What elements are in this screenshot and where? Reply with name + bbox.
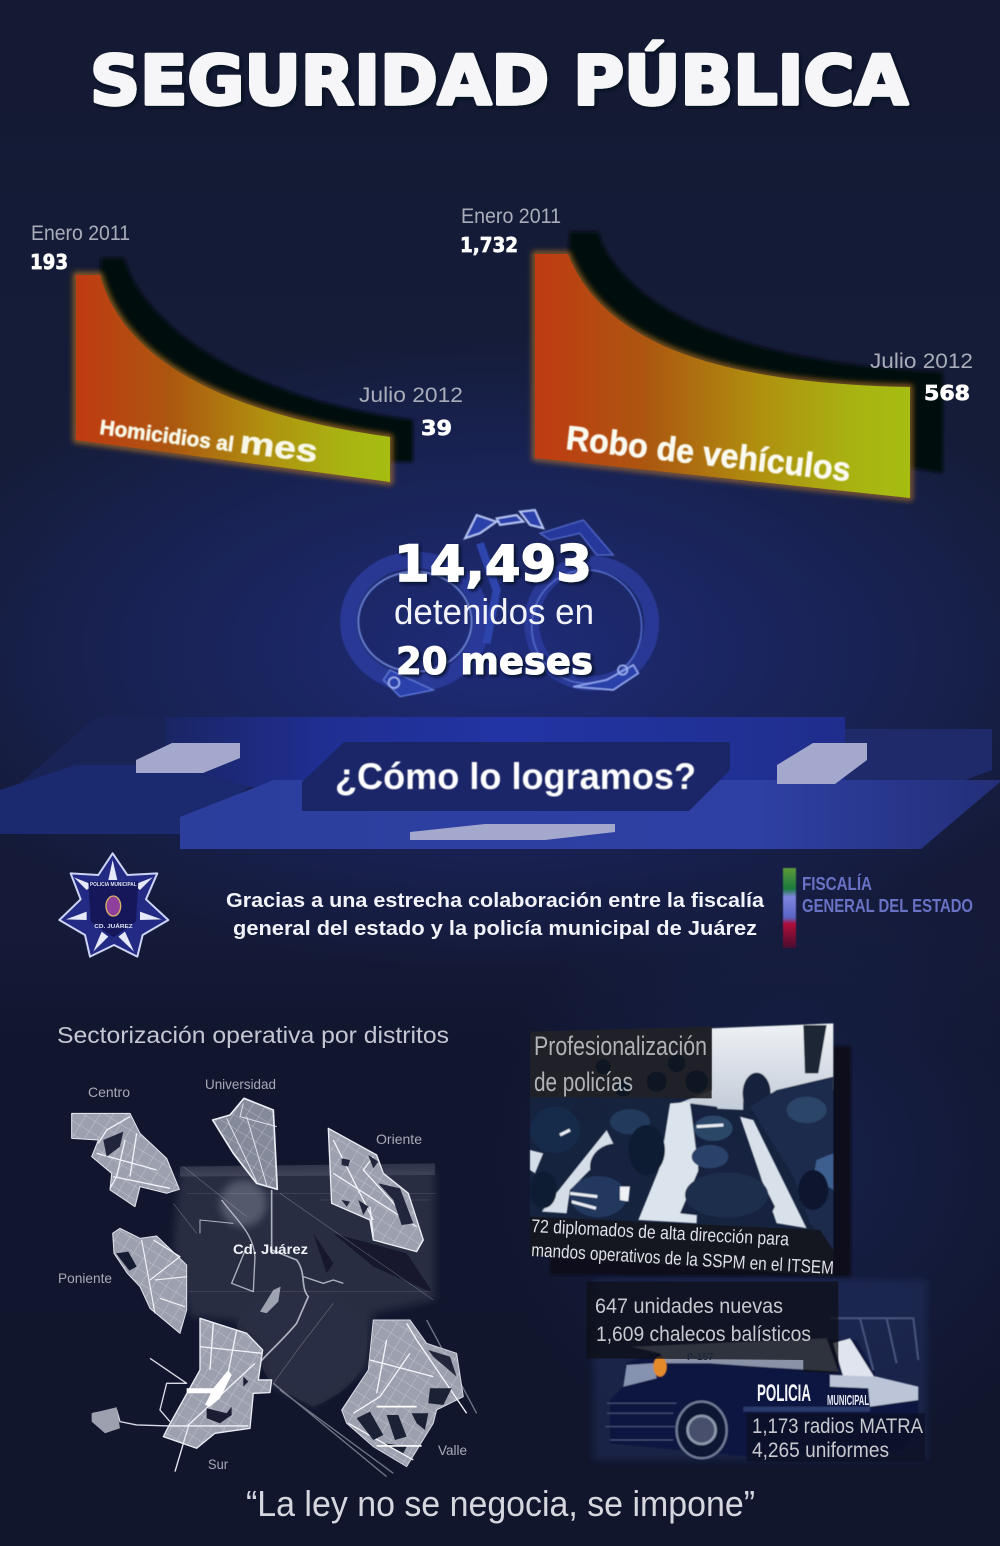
text: 20 meses: 20 meses xyxy=(396,640,593,683)
icon: police star badge xyxy=(59,853,168,957)
title: SEGURIDAD PÚBLICA xyxy=(90,41,908,121)
text: 647 unidades nuevas: 647 unidades nuevas xyxy=(595,1294,783,1318)
banner plate: left xyxy=(136,743,240,773)
banner heading: ¿Cómo lo logramos? xyxy=(335,756,696,797)
logo: fiscalia general del estado xyxy=(783,868,973,948)
district: sur xyxy=(92,1318,272,1472)
photo: police officers seated xyxy=(530,1023,833,1277)
chart: robo de vehiculos xyxy=(460,205,973,498)
text: 1,609 chalecos balisticos: 1,609 chalecos balísticos xyxy=(596,1322,811,1346)
district: valle xyxy=(342,1320,467,1467)
map label: valle: Valle xyxy=(438,1442,467,1458)
map label: oriente: Oriente xyxy=(376,1131,422,1147)
badge text: policia municipal: POLICIA MUNICIPAL xyxy=(90,882,137,888)
text: 4,265 uniformes: 4,265 uniformes xyxy=(752,1439,889,1462)
banner center plate xyxy=(302,742,730,811)
banner band: upper left xyxy=(18,717,250,787)
collaboration line 1: Gracias a una estrecha colaboración entre la fiscalía xyxy=(226,889,765,912)
label: enero 2011: Enero 2011 xyxy=(31,222,130,245)
district: universidad xyxy=(213,1098,277,1189)
map label: centro: Centro xyxy=(88,1084,130,1100)
map: roads xyxy=(173,1167,477,1477)
label: robo de vehiculos: Robo de vehículos xyxy=(564,419,853,489)
collaboration line 2: general del estado y la policía municipal de Juárez xyxy=(233,917,757,940)
value: 39: 39 xyxy=(421,416,452,440)
banner: como lo logramos xyxy=(0,717,1000,849)
label: homicidios al mes: Homicidios almes xyxy=(98,405,320,470)
banner band: top xyxy=(165,717,845,787)
label: julio 2012: Julio 2012 xyxy=(359,384,463,407)
label: julio 2012: Julio 2012 xyxy=(870,350,973,373)
photo panel: equipamiento xyxy=(587,1280,927,1462)
icon: handcuffs xyxy=(348,510,652,697)
collaboration text xyxy=(226,889,765,940)
quote: “La ley no se negocia, se impone” xyxy=(246,1483,755,1524)
map: central city haze xyxy=(173,1163,435,1407)
detained stat with handcuffs xyxy=(348,510,652,697)
photo heading: de policias: de policías xyxy=(534,1067,633,1097)
banner band: lower left xyxy=(0,765,249,834)
map artwork xyxy=(72,1098,477,1477)
map label: cd juarez: Cd. Juárez xyxy=(233,1241,308,1257)
map label: universidad: Universidad xyxy=(205,1076,276,1092)
label: enero 2011: Enero 2011 xyxy=(461,205,561,228)
banner plate: right xyxy=(777,743,867,784)
curve area: robo xyxy=(535,254,910,498)
banner band: upper right xyxy=(845,729,992,782)
banner plate: bottom xyxy=(410,824,615,840)
chart: homicidios al mes xyxy=(30,222,463,482)
chart shadow: homicidios xyxy=(100,258,413,462)
district: centro xyxy=(72,1113,179,1207)
heading: sectorizacion: Sectorización operativa por distritos xyxy=(57,1022,449,1048)
value: 1,732: 1,732 xyxy=(460,233,518,257)
text: 1,173 radios matra: 1,173 radios MATRA xyxy=(752,1415,923,1438)
chart glow: robo xyxy=(535,254,910,498)
value: 193: 193 xyxy=(30,250,68,274)
map label: sur: Sur xyxy=(208,1456,228,1472)
photo heading: profesionalizacion: Profesionalización xyxy=(534,1031,707,1061)
logo ribbon xyxy=(783,868,796,948)
text: municipal: MUNICIPAL xyxy=(827,1392,869,1409)
text: policia: POLICIA xyxy=(757,1380,811,1407)
badge text: cd juarez: CD. JUÁREZ xyxy=(94,923,133,930)
value: 568: 568 xyxy=(924,381,970,405)
curve area: homicidios xyxy=(76,275,390,482)
photo panel: profesionalizacion xyxy=(530,1023,851,1278)
map label: poniente: Poniente xyxy=(58,1270,112,1286)
chart glow: homicidios xyxy=(76,275,390,482)
map: ciudad juarez districts xyxy=(58,1076,477,1477)
photo shadow xyxy=(550,1046,851,1277)
district: oriente xyxy=(328,1128,423,1252)
logo text: fiscalia: FISCALÍA xyxy=(802,873,872,894)
banner band: main xyxy=(180,780,1000,849)
text: p-157 unit number: P-157 xyxy=(687,1352,714,1363)
text: detenidos en: detenidos en xyxy=(394,591,594,632)
truck photo xyxy=(587,1280,927,1462)
chart shadow: robo xyxy=(568,232,943,473)
district: poniente xyxy=(113,1228,187,1333)
photo caption line 1: 72 diplomados de alta dirección para xyxy=(531,1215,790,1250)
photo caption line 2: mandos operativos de la SSPM en el ITSEM xyxy=(531,1239,834,1278)
value: 14,493: 14,493 xyxy=(394,535,592,593)
